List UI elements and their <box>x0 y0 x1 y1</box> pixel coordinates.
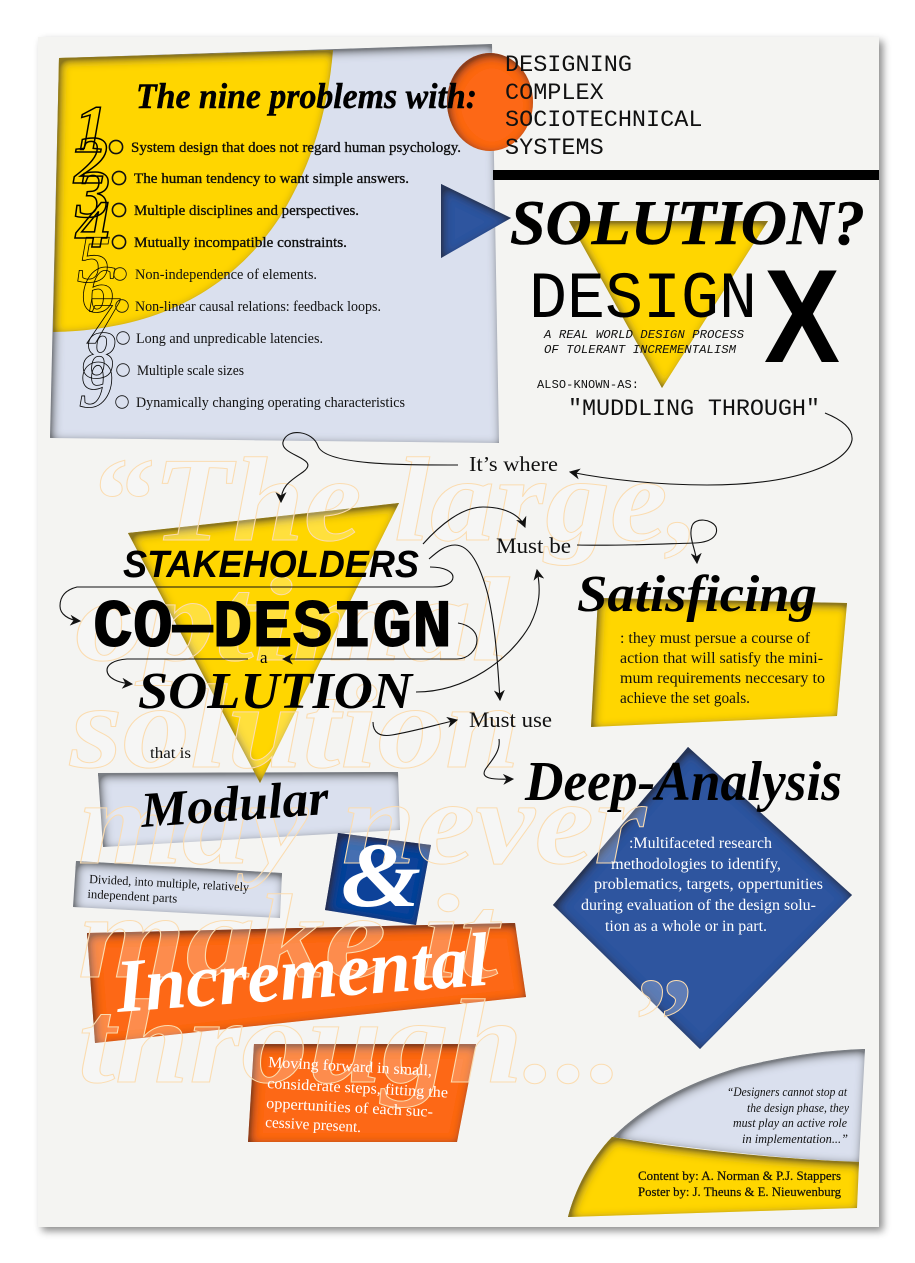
list of nine problems <box>131 140 461 411</box>
list of nine problems: Mutually incompatible constraints. <box>134 235 347 251</box>
panel: Moving forward <box>248 1044 476 1142</box>
text: incremental description <box>265 1054 449 1136</box>
arrow: solution to must use <box>373 720 457 735</box>
text: deep-analysis: Deep-Analysis <box>524 751 842 813</box>
text: deep-analysis description: problematics, targets, oppertunities <box>594 876 823 893</box>
text: divided description: independent parts <box>87 887 178 906</box>
arrow: co-design to a <box>283 623 477 659</box>
list numerals: 9 <box>79 346 113 422</box>
text: credits: Poster by: J. Theuns & E. Nieuwenburg <box>638 1184 841 1199</box>
text: solution: SOLUTION <box>138 663 415 720</box>
watermark quotation: may never <box>78 756 647 889</box>
text: satisficing: Satisficing <box>577 566 817 623</box>
list of nine problems: System design that does not regard human psychology. <box>131 140 461 156</box>
title: designing complex sociotechnical systems: SOCIOTECHNICAL <box>505 107 702 134</box>
text: incremental description: cessive present. <box>265 1114 362 1136</box>
watermark quotation: solution <box>69 660 520 793</box>
shape: blue triangle <box>441 184 511 258</box>
title: designing complex sociotechnical systems <box>505 52 702 162</box>
title: designing complex sociotechnical systems: DESIGNING <box>505 52 632 79</box>
arrow: solution to must be <box>416 570 539 692</box>
arrow: stakeholders to must use <box>429 545 500 700</box>
text: incremental description: considerate steps, fitting the <box>267 1075 449 1101</box>
text: a: a <box>260 648 268 667</box>
text: incremental description: Moving forward in small, <box>268 1054 432 1080</box>
shape: yellow triangle behind Design X <box>569 221 768 388</box>
text: footer quote <box>727 1084 849 1146</box>
text: that is: that is <box>150 745 191 762</box>
list numerals: 8 <box>82 317 116 393</box>
text: satisficing description: mum requirements neccesary to <box>620 670 825 687</box>
text: ampersand: & <box>341 824 421 926</box>
text: deep-analysis description: methodologies to identify, <box>611 856 781 873</box>
list of nine problems: Non-linear causal relations: feedback loops. <box>135 299 381 315</box>
heading: design: DESIGN <box>529 262 757 337</box>
heading: solution question: SOLUTION? <box>510 187 865 258</box>
list numerals: 1 <box>74 91 108 167</box>
text: footer quote: the design phase, they <box>747 1100 849 1115</box>
list of nine problems: Multiple disciplines and perspectives. <box>134 203 359 219</box>
text: deep-analysis description: :Multifaceted research <box>629 835 772 852</box>
list numerals: 7 <box>84 282 121 358</box>
text: divided description: Divided, into multiple, relatively <box>89 872 250 894</box>
text: credits <box>638 1168 841 1199</box>
list numerals: 5 <box>77 221 111 297</box>
watermark quotation: ” <box>628 953 690 1086</box>
watermark quotation: “The large, <box>88 433 700 566</box>
text: must be: Must be <box>496 533 571 558</box>
list of nine problems: Dynamically changing operating characteristics <box>136 395 405 411</box>
label: also known as: ALSO-KNOWN-AS: <box>537 378 639 392</box>
arrow: stakeholders to must be <box>423 507 525 544</box>
arrow: its where to stakeholders <box>281 433 458 502</box>
text: satisficing description: : they must persue a course of <box>620 630 811 647</box>
list numerals: 3 <box>75 156 110 232</box>
list numerals: 6 <box>81 251 115 327</box>
text: modular: Modular <box>138 769 331 838</box>
text: deep-analysis description <box>581 835 823 935</box>
text: satisficing description: achieve the set goals. <box>620 690 750 707</box>
arrow: must use to deep-analysis <box>484 739 513 779</box>
title: designing complex sociotechnical systems: COMPLEX <box>505 80 604 107</box>
text: divided description <box>87 872 250 909</box>
text: footer quote: “Designers cannot stop at <box>727 1084 847 1099</box>
panel: nine problems background <box>50 44 499 443</box>
panel: Modular <box>98 772 400 847</box>
arrow: muddling through to its where <box>570 413 852 485</box>
title: designing complex sociotechnical systems: SYSTEMS <box>505 135 604 162</box>
list numerals: 4 <box>74 186 110 262</box>
list of nine problems: Long and unpredicable latencies. <box>136 331 323 347</box>
watermark quotation: through... <box>78 975 623 1108</box>
text: must use: Must use <box>469 707 552 732</box>
watermark quotation: optimal <box>75 553 511 686</box>
text: satisficing description <box>620 630 825 707</box>
list of nine problems: The human tendency to want simple answers. <box>134 171 409 187</box>
text: stakeholders: STAKEHOLDERS <box>123 544 419 586</box>
subtitle: real world design process <box>543 328 745 357</box>
panel: Satisficing <box>591 598 847 727</box>
text: deep-analysis description: during evaluation of the design solu- <box>581 897 816 914</box>
watermark quotation: make it <box>78 870 502 1003</box>
arrow: stakeholders to co-design <box>60 567 453 621</box>
heading: X: X <box>764 243 840 391</box>
list of nine problems: Non-independence of elements. <box>135 267 317 283</box>
text: incremental description: oppertunities of each suc- <box>266 1095 433 1121</box>
text: credits: Content by: A. Norman & P.J. Stappers <box>638 1168 841 1183</box>
list numerals: 2 <box>73 122 108 198</box>
divider bar <box>493 170 879 180</box>
arrow: a to solution <box>107 659 248 684</box>
panel: footer quote and credits <box>568 1049 865 1217</box>
subtitle: real world design process: OF TOLERANT INCREMENTALISM <box>544 343 737 357</box>
text: satisficing description: action that will satisfy the mini- <box>620 650 823 667</box>
shape: orange circle <box>447 53 533 151</box>
text: incremental: Incremental <box>112 918 491 1029</box>
subtitle: real world design process: A REAL WORLD DESIGN PROCESS <box>543 328 745 342</box>
label: muddling through: "MUDDLING THROUGH" <box>568 396 820 423</box>
list bullets <box>109 140 129 408</box>
text: its where: It’s where <box>469 452 558 476</box>
heading: the nine problems: The nine problems with: <box>136 76 477 116</box>
panel: ampersand box <box>325 833 431 925</box>
list numerals <box>73 91 121 422</box>
shape: yellow triangle behind stakeholders <box>128 503 399 783</box>
text: co-design: CO—DESIGN <box>93 590 452 667</box>
panel: Divided <box>73 861 282 918</box>
watermark quotation <box>69 433 700 1108</box>
list of nine problems: Multiple scale sizes <box>137 363 244 379</box>
arrow: must be to satisficing <box>577 520 717 563</box>
panel: Deep-Analysis diamond <box>553 747 852 1049</box>
panel: Incremental <box>87 923 526 1043</box>
text: deep-analysis description: tion as a whole or in part. <box>605 918 767 935</box>
text: footer quote: in implementation...” <box>742 1131 848 1146</box>
text: footer quote: must play an active role <box>733 1115 847 1130</box>
